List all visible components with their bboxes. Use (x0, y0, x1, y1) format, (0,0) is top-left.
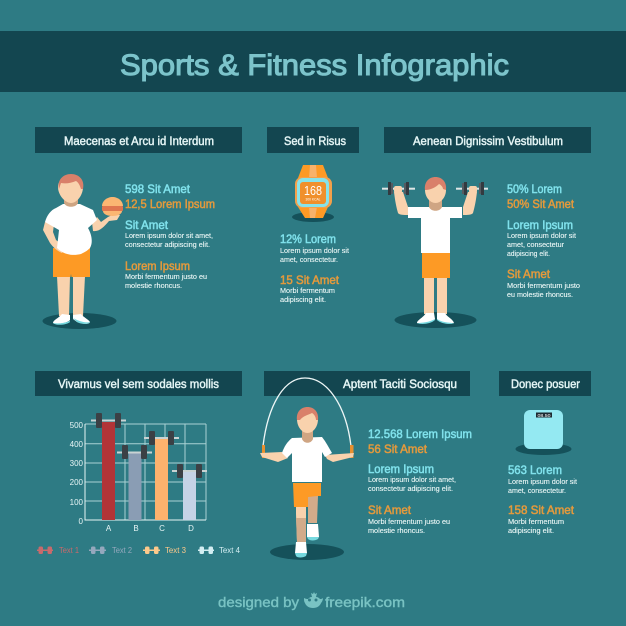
stats: scale: adipiscing elit. (508, 526, 554, 535)
stats: watch: 12% Lorem (280, 232, 336, 246)
bar chart: 100 (70, 498, 84, 507)
bar chart: A (106, 524, 112, 533)
stats: overweight man: Morbi fermentum justo eu (125, 272, 207, 281)
heading: Aenean (384, 127, 591, 153)
heading: Aenean: Aenean Dignissim Vestibulum (413, 136, 563, 148)
stats: dumbbell man (507, 182, 580, 299)
stats: jump rope: consectetur adipiscing elit. (368, 484, 453, 493)
chart legend: Text 2 (112, 546, 132, 555)
stats: overweight man: molestie rhoncus. (125, 281, 182, 290)
icon: sports watch (292, 165, 334, 222)
title banner: Sports & Fitness Infographic (120, 49, 509, 82)
figure: man lifting dumbbells (382, 177, 488, 328)
heading: Aptent: Aptent Taciti Sociosqu (343, 379, 457, 391)
icon: sports watch: 168 (304, 183, 322, 198)
stats: watch: adipiscing elit. (280, 295, 326, 304)
heading: Vivamus: Vivamus vel sem sodales mollis (58, 379, 219, 391)
stats: overweight man (125, 182, 215, 290)
figure: man with jump rope (260, 378, 354, 560)
stats: dumbbell man: 50% Lorem (507, 182, 562, 196)
icon: weighing scale: 08.50 (538, 413, 551, 418)
heading: Maecenas (35, 127, 242, 153)
stats: jump rope: Sit Amet (368, 503, 412, 517)
stats: jump rope: Morbi fermentum justo eu (368, 517, 450, 526)
stats: jump rope: Lorem Ipsum (368, 462, 434, 476)
bar chart: 400 (70, 440, 84, 449)
stats: scale (508, 463, 577, 535)
stats: jump rope (368, 427, 472, 535)
stats: dumbbell man: Sit Amet (507, 267, 551, 281)
figure: overweight man with burger (42, 174, 123, 329)
heading: Aptent (264, 371, 470, 396)
stats: dumbbell man: Lorem ipsum dolor sit (507, 231, 576, 240)
stats: dumbbell man: Lorem Ipsum (507, 218, 573, 232)
chart legend: Text 4 (219, 546, 241, 555)
stats: jump rope: 12.568 Lorem Ipsum (368, 427, 472, 441)
stats: overweight man: Lorem Ipsum (125, 259, 190, 273)
heading: Donec: Donec posuer (511, 379, 580, 391)
bar chart: 300 (70, 459, 84, 468)
stats: jump rope: molestie rhoncus. (368, 526, 425, 535)
stats: overweight man: Sit Amet (125, 218, 169, 232)
stats: watch: 15 Sit Amet (280, 273, 340, 287)
bar chart: C (159, 524, 165, 533)
footer credit: freepik.com (325, 594, 405, 610)
heading: Donec (499, 371, 591, 396)
stats: overweight man: consectetur adipiscing elit. (125, 240, 210, 249)
heading: Vivamus (35, 371, 242, 396)
bar chart: B (133, 524, 139, 533)
stats: dumbbell man: Morbi fermentum justo (507, 281, 580, 290)
stats: dumbbell man: adipiscing elit. (507, 249, 550, 258)
heading: Sed in Risus (267, 127, 359, 153)
stats: overweight man: Lorem ipsum dolor sit amet, (125, 231, 213, 240)
stats: jump rope: Lorem ipsum dolor sit amet, (368, 475, 456, 484)
icon: weighing scale (516, 410, 572, 455)
stats: overweight man: 598 Sit Amet (125, 182, 191, 196)
stats: overweight man: 12,5 Lorem Ipsum (125, 197, 215, 211)
heading: Maecenas: Maecenas et Arcu id Interdum (64, 136, 214, 148)
stats: scale: amet, consectetur. (508, 486, 566, 495)
stats: scale: Morbi fermentum (508, 517, 564, 526)
footer credit (218, 592, 405, 610)
stats: jump rope: 56 Sit Amet (368, 442, 428, 456)
chart legend: Text 3 (165, 546, 186, 555)
heading: Sed in Risus: Sed in Risus (284, 136, 346, 148)
title banner (0, 31, 626, 92)
icon: sports watch: 300 KCAL (306, 196, 321, 202)
stats: scale: 563 Lorem (508, 463, 562, 477)
bar chart: 0 (79, 517, 84, 526)
chart legend (37, 546, 241, 555)
bar chart: D (188, 524, 194, 533)
stats: scale: Lorem ipsum dolor sit (508, 477, 577, 486)
stats: watch (280, 232, 349, 304)
stats: watch: Morbi fermentum (280, 286, 335, 295)
stats: watch: amet, consectetur. (280, 255, 338, 264)
bar chart: 200 (70, 478, 84, 487)
stats: dumbbell man: eu molestie rhoncus. (507, 290, 573, 299)
chart legend: Text 1 (59, 546, 79, 555)
stats: dumbbell man: 50% Sit Amet (507, 197, 575, 211)
stats: scale: 158 Sit Amet (508, 503, 575, 517)
stats: watch: Lorem ipsum dolor sit (280, 246, 349, 255)
stats: dumbbell man: amet, consectetur (507, 240, 565, 249)
bar chart: 500 (70, 421, 84, 430)
bar chart (70, 413, 207, 533)
footer credit: designed by (218, 594, 299, 610)
